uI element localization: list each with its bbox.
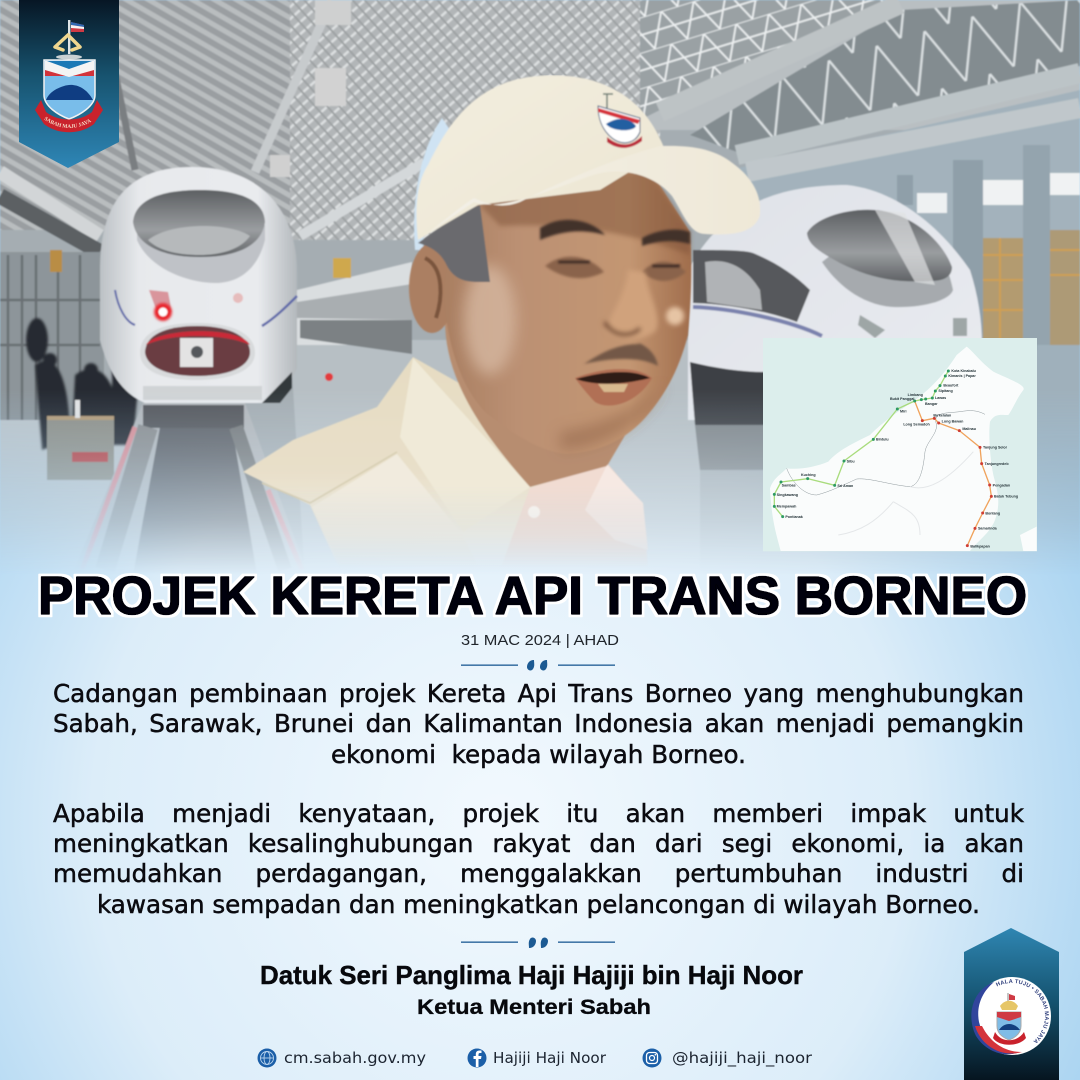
orange route line: [915, 401, 991, 546]
station labels: Pengadan: [993, 483, 1010, 487]
right train: [688, 185, 982, 470]
green route line: [774, 371, 948, 517]
left train: [100, 167, 297, 403]
orange stations: [921, 417, 993, 547]
inner collar: [512, 464, 620, 540]
website text: cm.sabah.gov.my: [284, 1049, 426, 1067]
regional borders: [838, 452, 973, 535]
station labels: Sibu: [847, 459, 855, 463]
icon: globe: [258, 1048, 276, 1068]
station labels: Sambas: [782, 484, 796, 488]
cap crest logo: [598, 94, 642, 148]
land patch southeast: [1020, 527, 1037, 551]
ring text: HALA TUJU • SABAH MAJU JAYA: [996, 979, 1049, 1043]
left roof stripes: [0, 0, 300, 230]
pale cut-out halo: [414, 118, 450, 250]
paragraph one: Sabah, Sarawak, Brunei dan Kalimantan Indonesia akan menjadi pemangkin: [53, 709, 1024, 738]
station labels: Tanjungredeb: [985, 462, 1009, 466]
small crest: [993, 993, 1026, 1045]
right roof bright trusses: [640, 0, 890, 120]
paragraph one: [53, 679, 1024, 769]
badge banner: [964, 928, 1059, 1080]
flag and pole: [68, 20, 84, 54]
author position: Ketua Menteri Sabah: [417, 996, 651, 1019]
paragraph two: Apabila menjadi kenyataan, projek itu akan memberi impak untuk: [53, 799, 1024, 828]
paragraph one: ekonomi kepada wilayah Borneo.: [331, 740, 746, 769]
portrait of Datuk Seri Panglima Haji Hajiji: [243, 75, 760, 570]
station labels: Bontang: [985, 511, 1000, 515]
depot hall fading into the background: [0, 0, 1080, 580]
footer contact row: [258, 1048, 813, 1068]
columns, windows and scaffolding right: [897, 145, 1080, 346]
lower face shadow: [560, 385, 665, 450]
hair: [418, 205, 490, 282]
opening quote ornament: [461, 660, 615, 670]
motto ribbon: [35, 100, 103, 132]
station labels: Tanjung Selor: [983, 446, 1008, 450]
station labels: Bangar: [925, 402, 938, 406]
right collar: [585, 465, 648, 550]
station labels: Long Semadoh: [903, 422, 930, 426]
station labels: Mempawah: [777, 505, 796, 509]
right truss beams: [660, 4, 1080, 172]
wreath: [56, 54, 82, 60]
date line: 31 MAC 2024 | AHAD: [461, 632, 619, 649]
forehead shade: [480, 170, 690, 255]
station labels: Kuching: [801, 473, 816, 477]
cheek highlight: [464, 265, 516, 375]
face: [444, 170, 691, 454]
floor left: [0, 419, 125, 528]
route map of Borneo railway: [763, 338, 1037, 551]
right hall background wall: [741, 90, 1080, 245]
station labels: Bukit Panggal: [890, 397, 914, 401]
right roof upper area: [640, 0, 1080, 130]
station labels: Sri Aman: [837, 484, 853, 488]
author name: Datuk Seri Panglima Haji Hajiji bin Haji Noor: [260, 960, 803, 990]
station labels: Kota Kinabalu: [951, 369, 976, 373]
station labels: Sipitang: [938, 389, 953, 393]
badge banner: [19, 0, 119, 168]
cap brim: [418, 146, 760, 240]
map sea background: [763, 338, 1037, 551]
political borders: [787, 411, 985, 495]
collar button: [528, 506, 540, 518]
neck: [445, 320, 640, 487]
paragraph two: meningkatkan kesalinghubungan rakyat dan dari segi ekonomi, ia akan: [53, 829, 1024, 858]
paragraph two: kawasan sempadan dan meningkatkan pelancongan di wilayah Borneo.: [97, 890, 980, 919]
ear: [408, 244, 448, 334]
moustache: [584, 343, 658, 366]
icon: facebook: [468, 1048, 486, 1068]
icon: instagram: [642, 1048, 662, 1068]
station labels: Balikpapan: [970, 544, 990, 548]
station labels: [777, 369, 1018, 548]
shield: [44, 60, 95, 119]
lower shirt highlight: [322, 454, 434, 502]
station labels: Ba'kelalan: [933, 414, 951, 418]
base tone: [0, 129, 1038, 560]
station labels: Limbang: [908, 393, 923, 397]
left overhang beam: [0, 72, 139, 253]
floor right: [292, 340, 700, 510]
facebook name: Hajiji Haji Noor: [493, 1049, 607, 1067]
shirt sleeve crease: [262, 452, 397, 503]
station labels: Samarinda: [978, 527, 998, 531]
eyes: [545, 257, 686, 281]
station labels: Miri: [900, 409, 907, 413]
gold clasped hands: [55, 35, 80, 50]
white roundel: [973, 977, 1051, 1055]
eyebrows: [540, 220, 690, 246]
station labels: Long Bawan: [942, 420, 963, 424]
green stations: [773, 369, 950, 518]
centre roof lattice: [290, 0, 660, 240]
centre roof beam: [300, 162, 425, 236]
motto ribbon: SABAH MAJU JAYA: [44, 116, 92, 128]
Borneo land mass: [770, 347, 1024, 551]
title: PROJEK KERETA API TRANS BORNEO: [38, 566, 1027, 626]
badge: Sabah state crest, top-left: [19, 0, 119, 168]
paragraph two: [52, 799, 1024, 919]
cap crown: [416, 75, 665, 240]
badge: Hala Tuju roundel, bottom-right: [964, 928, 1059, 1080]
station labels: Malinau: [962, 427, 976, 431]
rear coaches: [297, 258, 412, 354]
shirt body: [243, 357, 648, 570]
nose: [605, 270, 684, 339]
mouth: [575, 369, 652, 406]
main roof beam with panels: [255, 0, 351, 177]
blue and red crescent: [971, 982, 1022, 1054]
track pit: [87, 404, 296, 560]
workers and trolley: [26, 318, 138, 480]
closing quote ornament: [461, 938, 615, 948]
left back hall with scaffolding: [0, 250, 104, 422]
station labels: Bintulu: [876, 438, 889, 442]
station labels: Pontianak: [785, 515, 804, 519]
red marker on floor: [325, 373, 333, 381]
right roof long truss: [690, 0, 1080, 152]
paragraph two: memudahkan perdagangan, menggalakkan pertumbuhan industri di: [53, 859, 1024, 888]
paragraph one: Cadangan pembinaan projek Kereta Api Trans Borneo yang menghubungkan: [53, 679, 1024, 708]
left collar: [400, 359, 530, 488]
station labels: Singkawang: [777, 493, 798, 497]
station labels: Kimanis | Papar: [948, 374, 976, 378]
instagram handle: @hajiji_haji_noor: [672, 1049, 813, 1068]
station labels: Beaufort: [943, 384, 959, 388]
station labels: Lawas: [935, 396, 946, 400]
station labels: Batuk Tebung: [994, 495, 1018, 499]
